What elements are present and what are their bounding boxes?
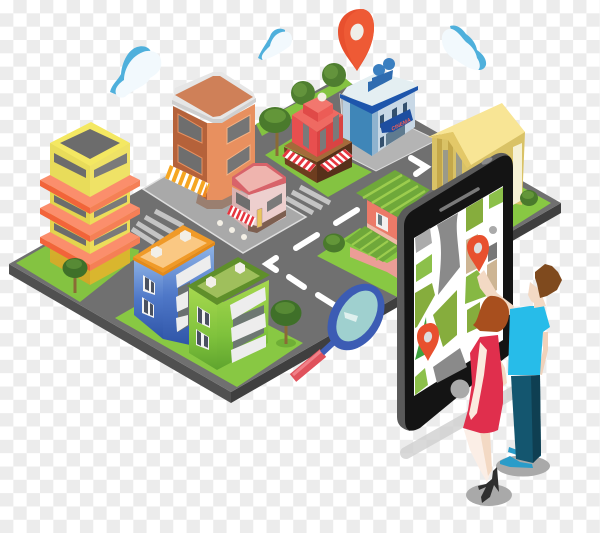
crosswalk: right: [286, 187, 330, 213]
tower floor slabs: [40, 175, 140, 271]
pavement: orange building block: [143, 155, 306, 253]
man pointing arm: [477, 270, 514, 316]
woman inner arm: [469, 342, 487, 420]
tree: back centre: [259, 107, 291, 156]
tree: right block: [323, 234, 345, 252]
cinema building: [340, 58, 418, 156]
man shadow: [496, 456, 550, 476]
green building roof vents: [206, 262, 245, 288]
pink shop building: [227, 163, 286, 233]
man shoes: [500, 447, 541, 468]
green apartment building: [187, 257, 270, 370]
bush: back left: [291, 81, 315, 105]
tree: left block: [62, 258, 88, 293]
city platform: [9, 77, 561, 403]
pavement: cinema block: [340, 94, 437, 171]
cloud: right: [442, 25, 486, 70]
restaurant building (red): [282, 92, 353, 183]
orange office building: [165, 72, 256, 209]
map pin: upper: [467, 235, 489, 272]
green patch: restaurant block: [265, 136, 372, 197]
man trousers: [511, 375, 541, 463]
cloud: middle: [258, 29, 292, 60]
woman arm: [498, 355, 507, 386]
cloud: left: [110, 46, 161, 98]
green patch: far corner: [505, 187, 551, 227]
phone shadow: [406, 392, 514, 453]
pink shop awning: [227, 205, 256, 227]
large location pin: [338, 9, 374, 71]
woman hair: [473, 296, 509, 332]
woman dress: [463, 335, 503, 433]
green patch: back strip: [256, 78, 352, 136]
phone home button: [450, 380, 470, 398]
cinema camera icon: [368, 58, 395, 92]
blue apartment building: [133, 225, 215, 345]
tree: front right: [270, 300, 302, 348]
green-roof building: [345, 170, 430, 278]
phone screen map: [414, 186, 503, 396]
cinema marquee: CINEMA: [391, 117, 411, 133]
restaurant awning: right: [320, 149, 353, 172]
map pin: lower: [417, 323, 439, 361]
yellow house with portico: [428, 103, 525, 205]
woman legs: [464, 430, 492, 482]
man head: [528, 264, 562, 308]
yellow tower building: [40, 122, 140, 285]
woman shadow: [466, 484, 512, 506]
restaurant awning: left: [282, 149, 316, 172]
crosswalk: left: [132, 211, 183, 243]
man t-shirt: [508, 306, 550, 375]
small tree: far corner: [520, 190, 538, 206]
woman: [463, 296, 512, 506]
green patch: yellow building: [16, 232, 139, 302]
road markings: [267, 158, 426, 305]
phone speaker and camera: [441, 156, 493, 210]
magnifying glass: [293, 273, 396, 378]
green patch: right block: [317, 228, 425, 297]
man far arm: [538, 332, 548, 375]
orange building awning: [165, 165, 210, 197]
green patch: front buildings: [115, 280, 303, 387]
smartphone: [397, 153, 513, 431]
woman high heels: [478, 467, 499, 503]
pavement dots: [217, 220, 247, 240]
bush: back right: [322, 63, 346, 87]
blue building roof vents: [151, 230, 191, 258]
man: [477, 264, 562, 476]
